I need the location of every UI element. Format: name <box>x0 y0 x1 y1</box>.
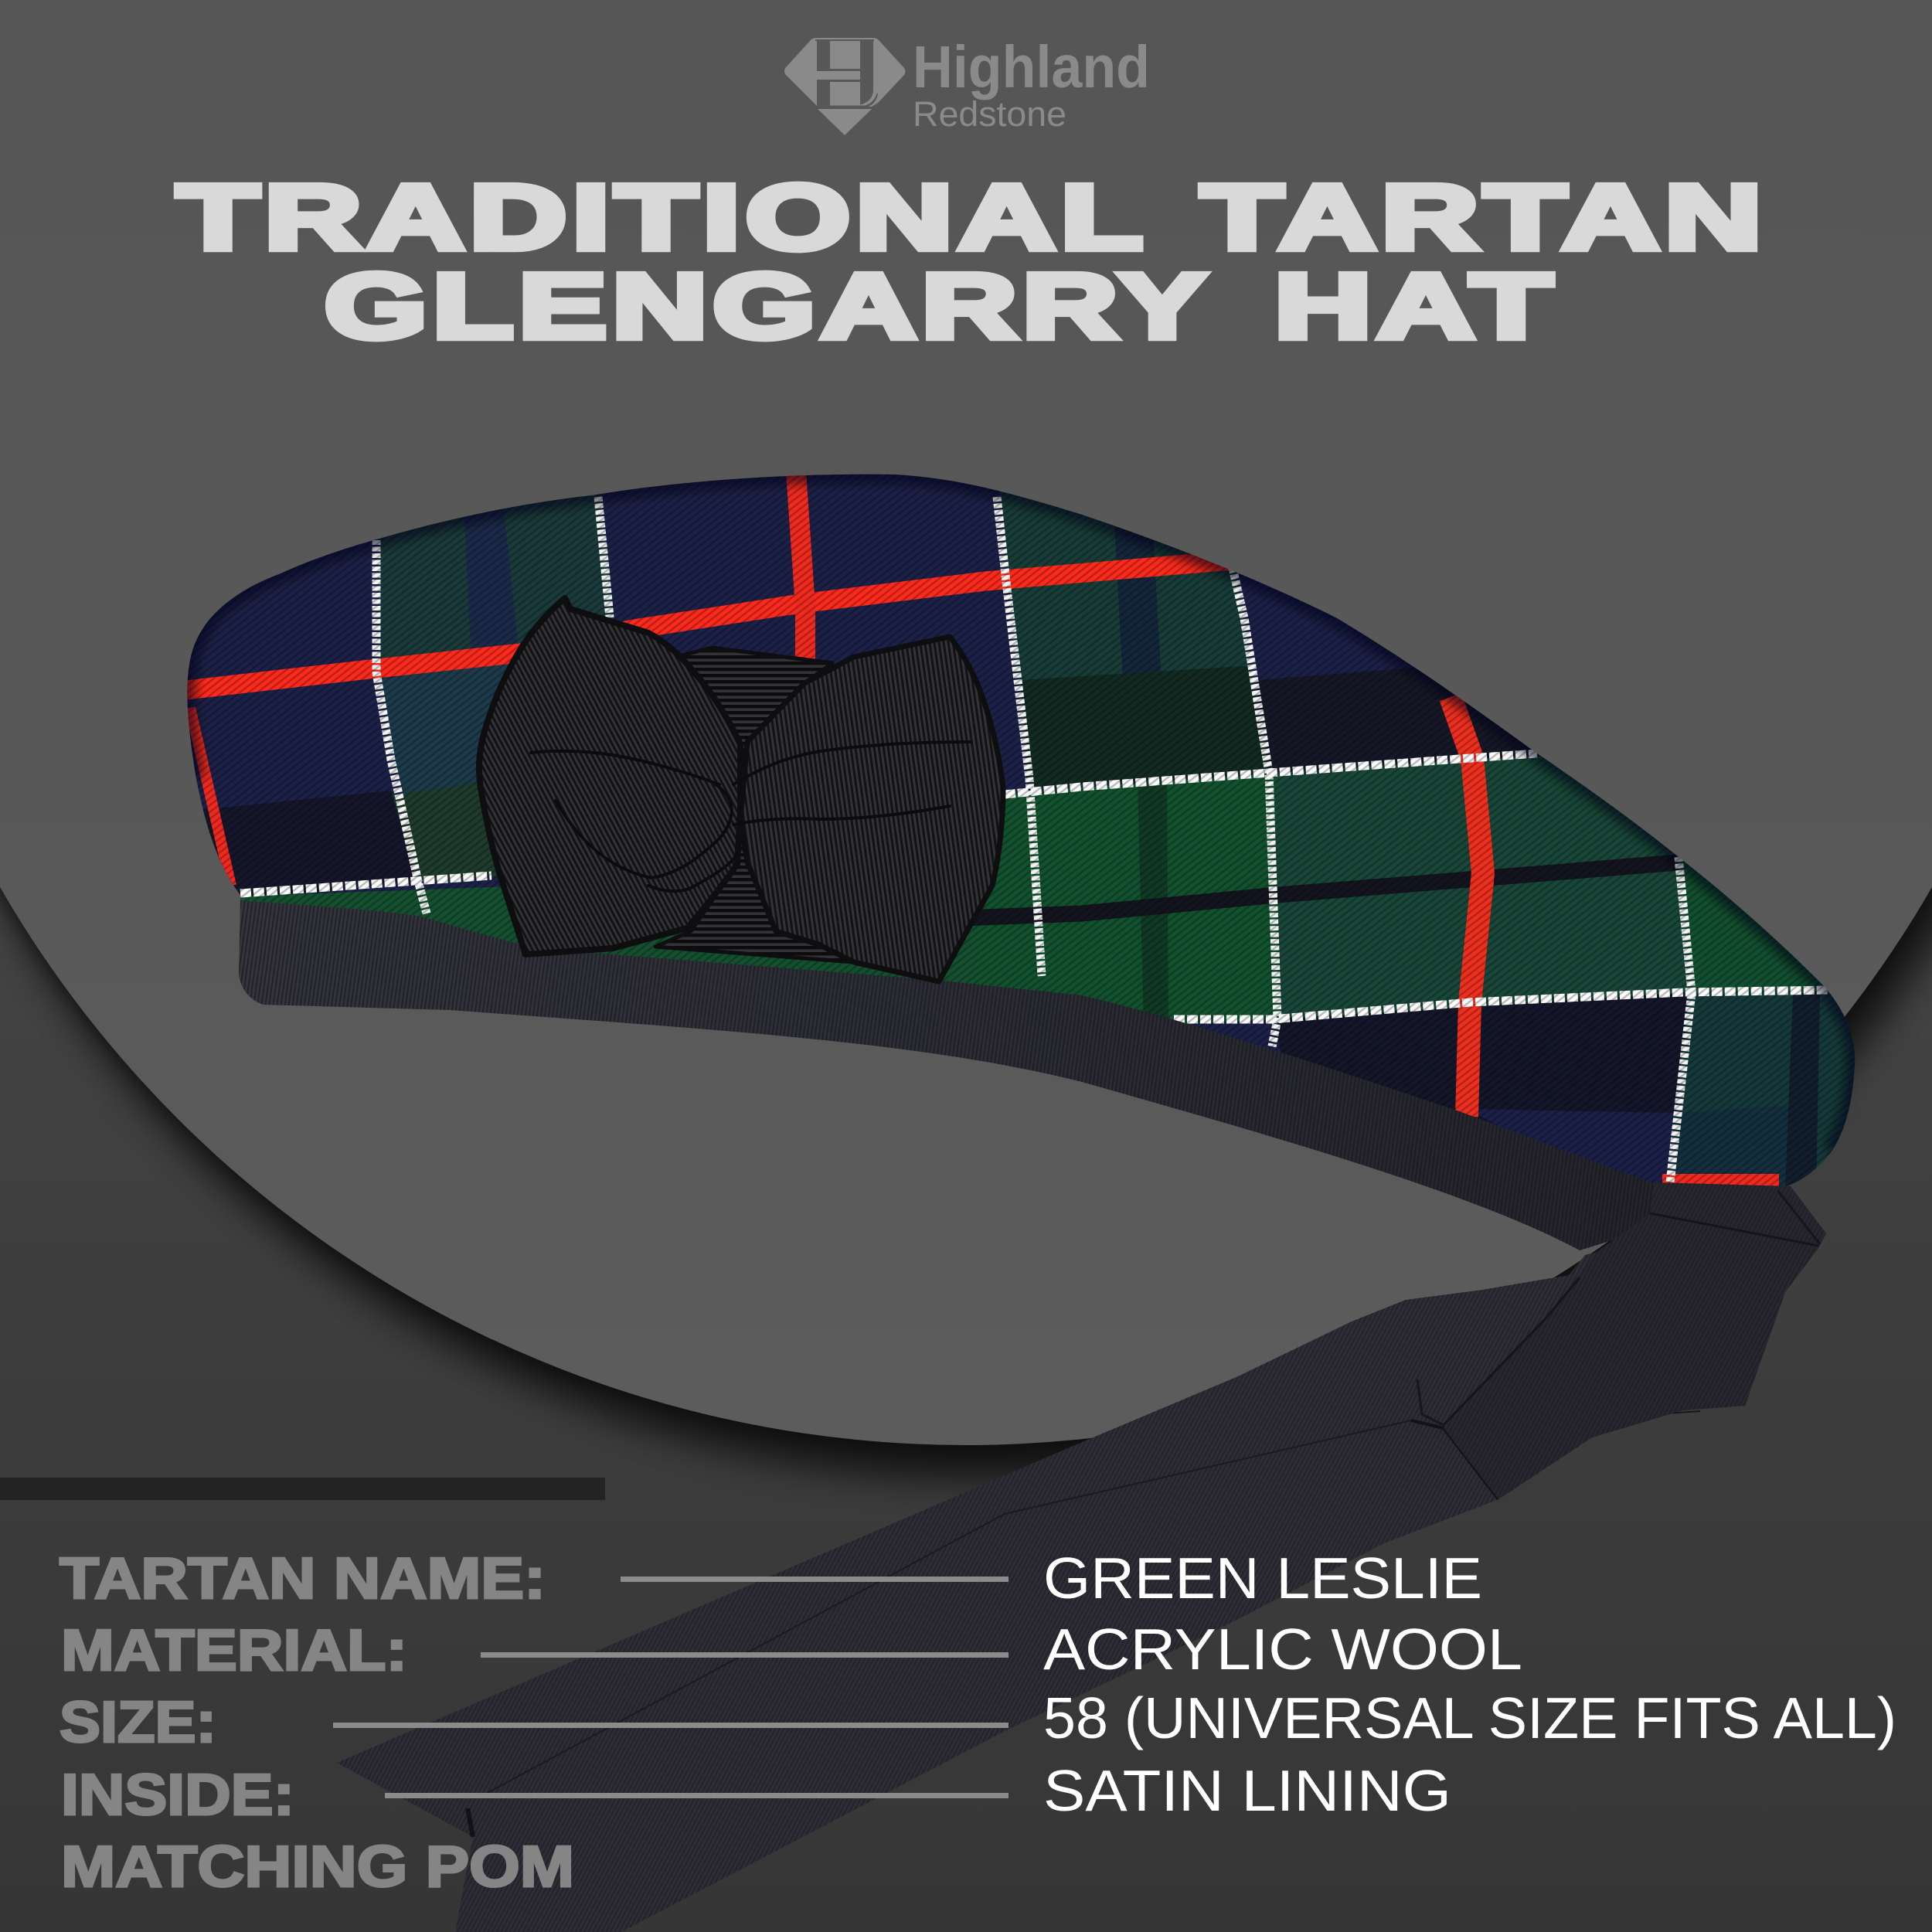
tartan stripes <box>185 471 1830 1182</box>
title: TARTAN <box>1201 166 1767 269</box>
spec values: SATIN LINING <box>1043 1758 1451 1823</box>
spec values: GREEN LESLIE <box>1043 1546 1482 1611</box>
title <box>177 166 1767 358</box>
background disc <box>0 0 1932 1445</box>
shadow under disc <box>0 0 1932 1478</box>
spec values: ACRYLIC WOOL <box>1043 1617 1522 1682</box>
spec labels: SIZE: <box>60 1689 216 1754</box>
title: GLENGARRY <box>325 255 1212 358</box>
logo wordmark: Redstone: Redstone <box>913 94 1066 134</box>
twill texture <box>178 464 1870 1198</box>
bow centre strap <box>655 648 854 962</box>
logo <box>784 34 1150 135</box>
spec values <box>1043 1546 1896 1823</box>
bow knot folds <box>531 742 971 891</box>
hat bow <box>479 598 1003 981</box>
title: HAT <box>1274 255 1558 358</box>
spec labels: MATCHING POM <box>61 1834 574 1899</box>
bow right wing <box>740 637 1003 981</box>
crown edge shading <box>187 474 1855 1151</box>
icon: diamond monogram <box>784 38 906 135</box>
spec labels: MATERIAL: <box>61 1617 407 1682</box>
accent bar <box>0 1478 605 1500</box>
spec labels: INSIDE: <box>61 1762 294 1827</box>
hat tartan crown <box>178 464 1870 1198</box>
bow left wing <box>479 598 740 954</box>
spec values: 58 (UNIVERSAL SIZE FITS ALL) <box>1043 1685 1896 1750</box>
spec labels <box>60 1546 574 1899</box>
connector lines <box>333 1577 1009 1798</box>
spec labels: TARTAN NAME: <box>60 1546 546 1611</box>
logo wordmark: Highland: Highland <box>913 34 1150 100</box>
tartan colour blocks <box>185 464 1870 1190</box>
hat back knot <box>1444 1182 1826 1499</box>
hat rim band <box>239 900 1695 1250</box>
title: TRADITIONAL <box>177 166 1148 269</box>
spec rows <box>60 1546 1896 1899</box>
hat ribbon tail <box>337 1206 1818 1932</box>
